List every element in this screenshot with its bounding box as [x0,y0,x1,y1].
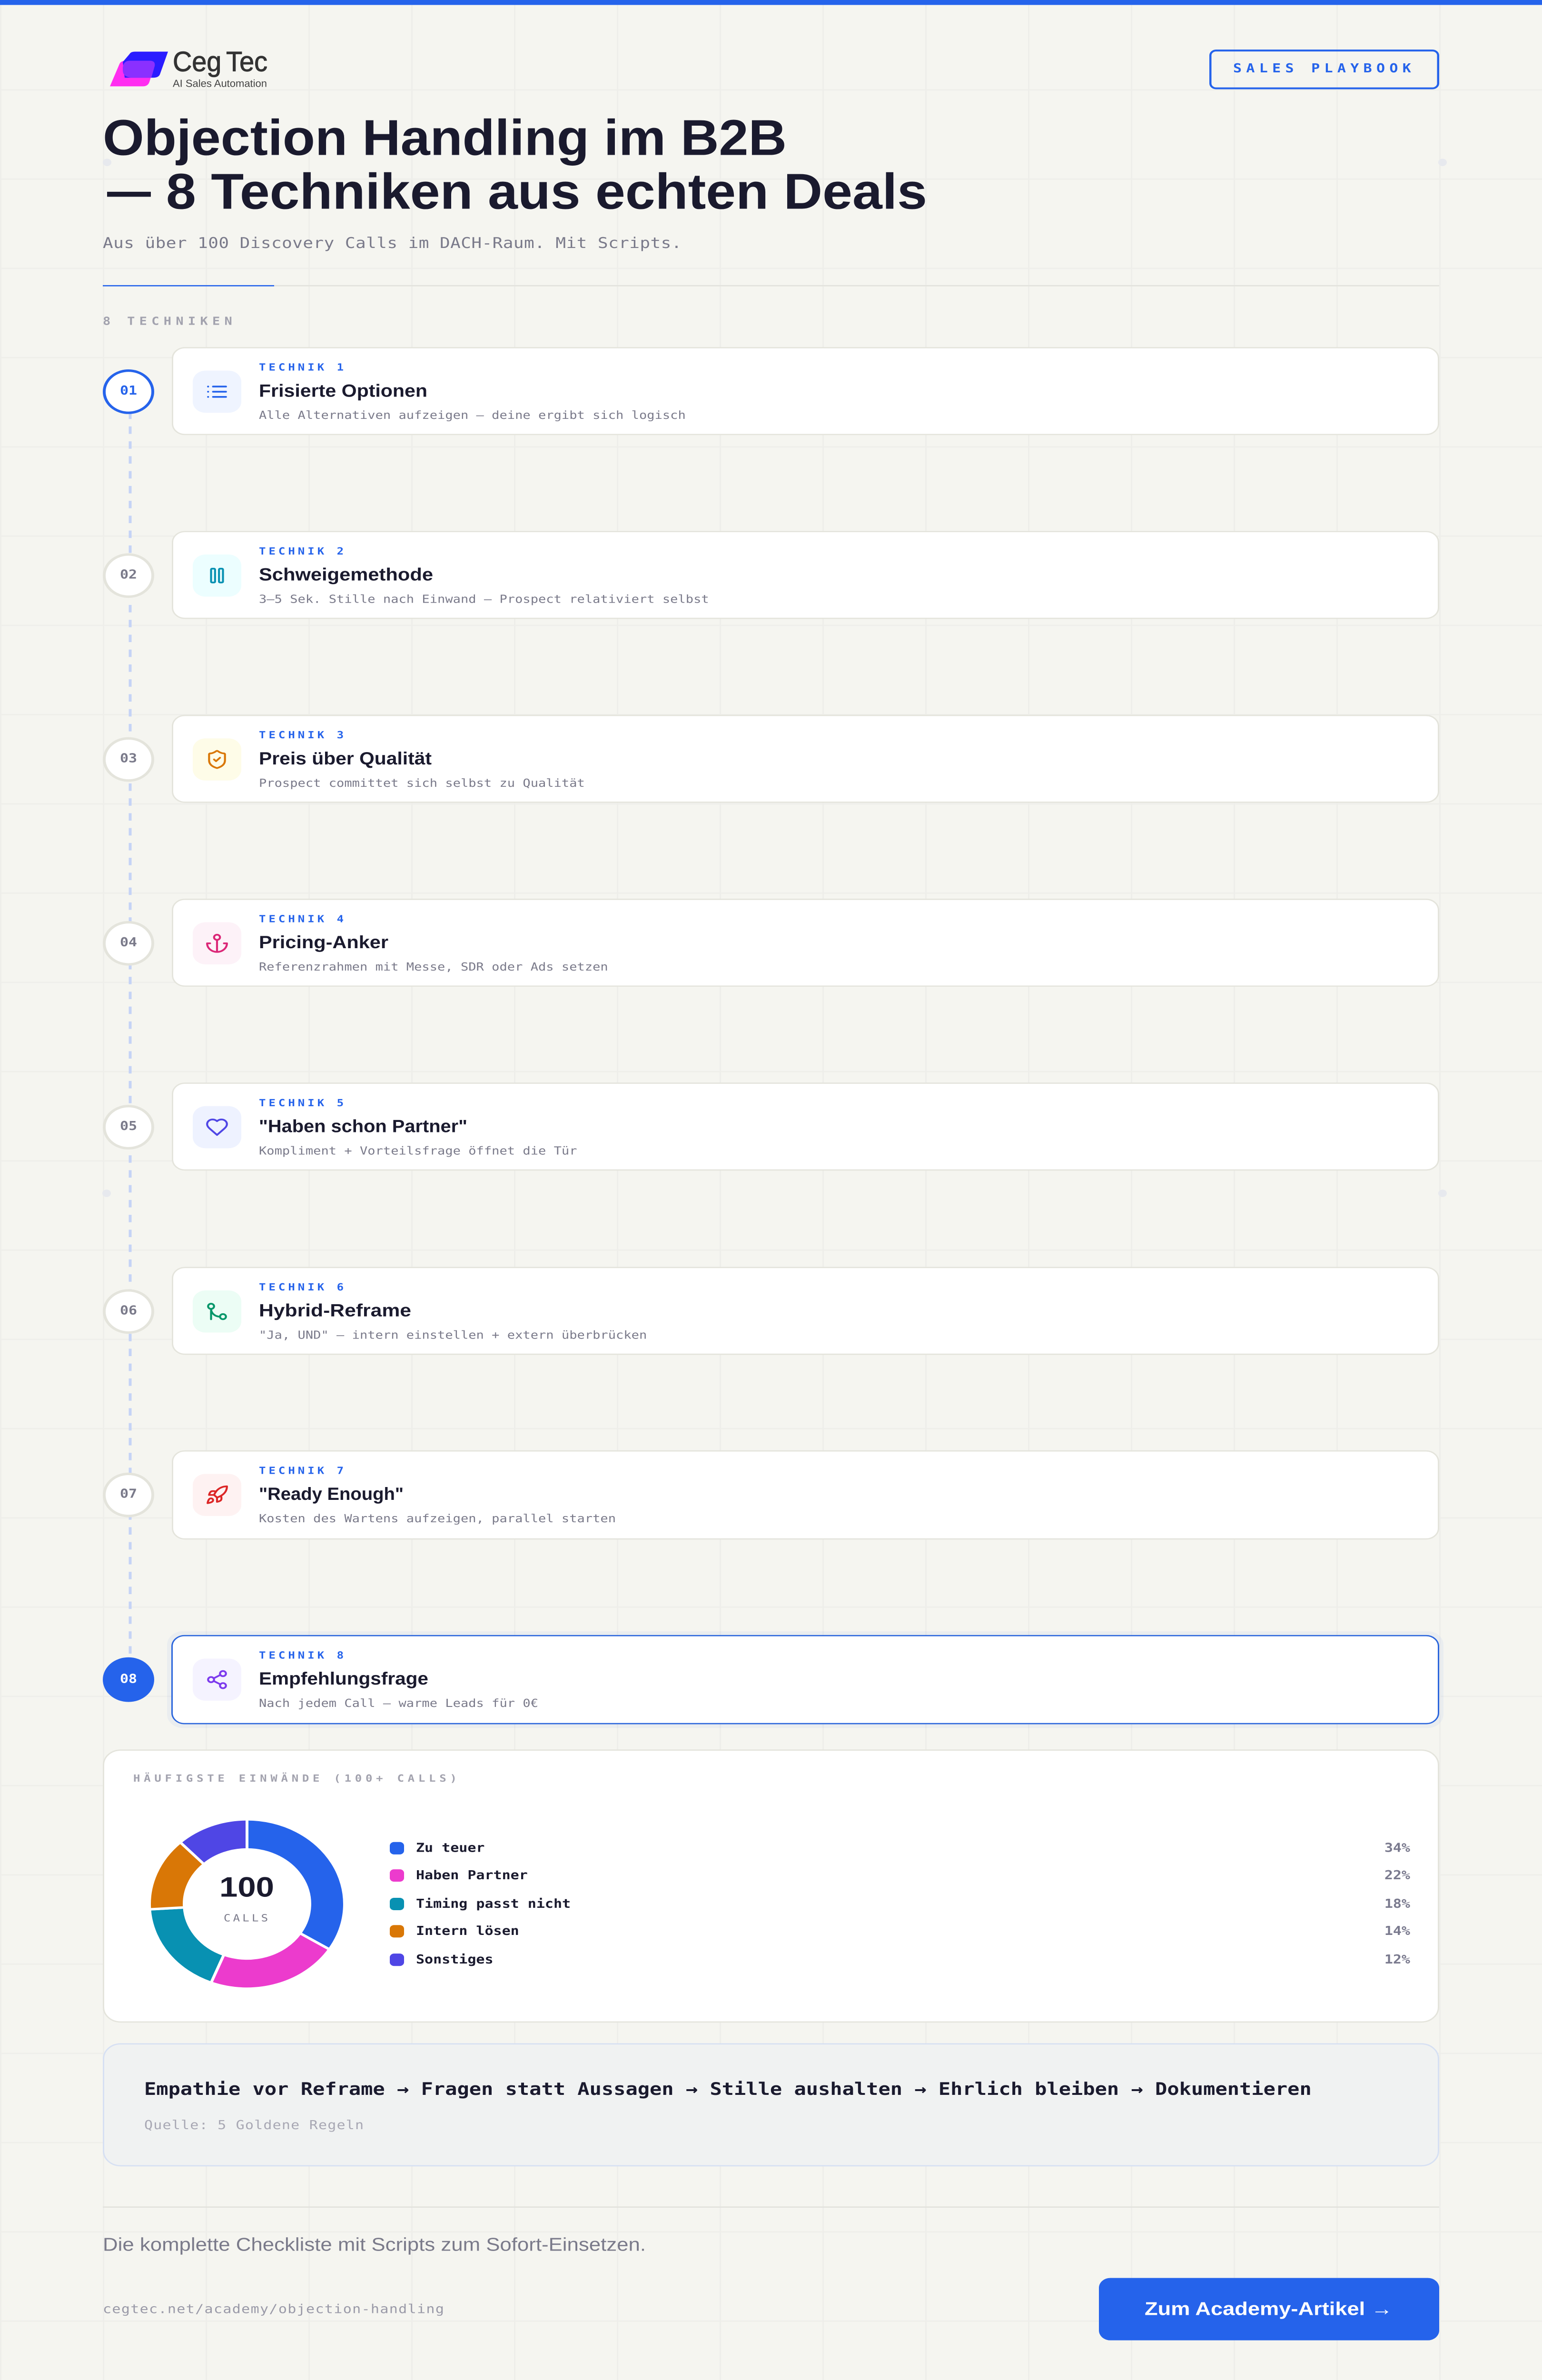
technique 8 highlighted: Empfehlungsfrage [259,1669,428,1689]
technique 2 [104,532,1438,618]
technique 1: Frisierte Optionen [259,381,427,401]
technique 5 [104,1083,1438,1170]
technique 7: "Ready Enough" [259,1484,404,1504]
technique 1: 01 [120,384,137,398]
subtitle: Aus über 100 Discovery Calls im DACH-Raum. Mit Scripts. [103,235,682,252]
icon: shield check [209,751,225,768]
legend: 34% [1384,1841,1410,1855]
technique 5: Kompliment + Vorteilsfrage öffnet die Tür [259,1145,577,1157]
donut center value [219,1871,274,1924]
technique 1 [104,347,1438,435]
title: — [107,162,151,218]
technique 4: TECHNIK 4 [259,913,346,925]
chart heading: HÄUFIGSTE EINWÄNDE (100+ CALLS) [133,1772,461,1784]
technique 6: "Ja, UND" — intern einstellen + extern überbrücken [259,1329,647,1342]
technique 5: "Haben schon Partner" [259,1116,467,1136]
logo: CegTec [110,46,267,89]
technique 1: TECHNIK 1 [259,362,346,373]
panel: objections chart [104,1750,1438,2022]
donut center value: CALLS [224,1912,270,1924]
footer text: Die komplette Checkliste mit Scripts zum Sofort-Einsetzen. [103,2234,646,2255]
logo: CegTec: AI Sales Automation [173,78,267,89]
technique 2: TECHNIK 2 [259,545,346,557]
timeline connector [128,412,131,1654]
logo: CegTec: CegTec [173,46,267,77]
legend: 14% [1384,1924,1410,1938]
technique 4: Pricing-Anker [259,932,388,952]
technique 1: Alle Alternativen aufzeigen — deine ergibt sich logisch [259,409,686,422]
donut chart [149,1819,345,1989]
technique 8 highlighted: TECHNIK 8 [259,1649,346,1661]
button: academy article: Zum Academy-Artikel → [1145,2298,1393,2319]
legend: 18% [1384,1896,1410,1911]
title [103,109,927,219]
technique 3: Preis über Qualität [259,749,432,769]
technique 8 highlighted: 08 [120,1672,137,1686]
technique 5: 05 [120,1119,137,1133]
legend: Haben Partner [416,1868,528,1883]
icon: rocket [208,1487,227,1503]
technique 8 highlighted [103,1631,1443,1728]
technique 6: 06 [120,1303,137,1318]
title: Objection Handling im B2B [103,109,787,166]
callout: golden rules: Empathie vor Reframe → Fragen statt Aussagen → Stille aushalten → Ehrlich bleiben → Dokumentieren [144,2079,1312,2099]
technique 6: Hybrid-Reframe [259,1301,411,1320]
legend: Zu teuer [416,1841,484,1855]
technique 3: TECHNIK 3 [259,729,346,741]
technique 7: 07 [120,1487,137,1501]
icon: pause [211,569,223,583]
legend: Sonstiges [416,1953,494,1967]
technique 2: 02 [120,567,137,582]
icon: git merge [208,1304,226,1319]
technique 4: 04 [120,935,137,950]
technique 3 [104,715,1438,802]
technique 7 [104,1451,1438,1539]
title: 8 Techniken aus echten Deals [166,163,927,219]
technique 2: 3–5 Sek. Stille nach Einwand — Prospect relativiert selbst [259,593,709,606]
badge: sales playbook: SALES PLAYBOOK [1233,61,1415,76]
icon: anchor [207,935,227,952]
button: academy article [1099,2278,1439,2340]
icon: list [208,387,226,397]
section label: 8 TECHNIKEN [103,315,237,327]
technique 4 [104,899,1438,986]
donut center value: 100 [219,1871,274,1903]
technique 5: TECHNIK 5 [259,1097,346,1109]
legend: 12% [1384,1953,1410,1967]
technique 4: Referenzrahmen mit Messe, SDR oder Ads setzen [259,961,608,973]
technique 3: Prospect committet sich selbst zu Qualität [259,777,585,790]
technique 6: TECHNIK 6 [259,1281,346,1293]
technique 8 highlighted: Nach jedem Call — warme Leads für 0€ [259,1697,538,1710]
technique 7: Kosten des Wartens aufzeigen, parallel starten [259,1512,616,1525]
badge: sales playbook [1210,50,1438,89]
technique 2: Schweigemethode [259,565,433,585]
callout: golden rules [104,2044,1438,2166]
footer url: cegtec.net/academy/objection-handling [103,2302,445,2316]
legend: 22% [1384,1868,1410,1883]
legend [390,1841,1410,1967]
icon: heart [207,1120,227,1135]
callout: golden rules: Quelle: 5 Goldene Regeln [144,2118,364,2132]
icon: share [208,1671,226,1688]
legend: Intern lösen [416,1924,519,1938]
technique 6 [104,1268,1438,1354]
legend: Timing passt nicht [416,1896,571,1911]
technique 7: TECHNIK 7 [259,1465,346,1477]
technique 3: 03 [120,751,137,766]
